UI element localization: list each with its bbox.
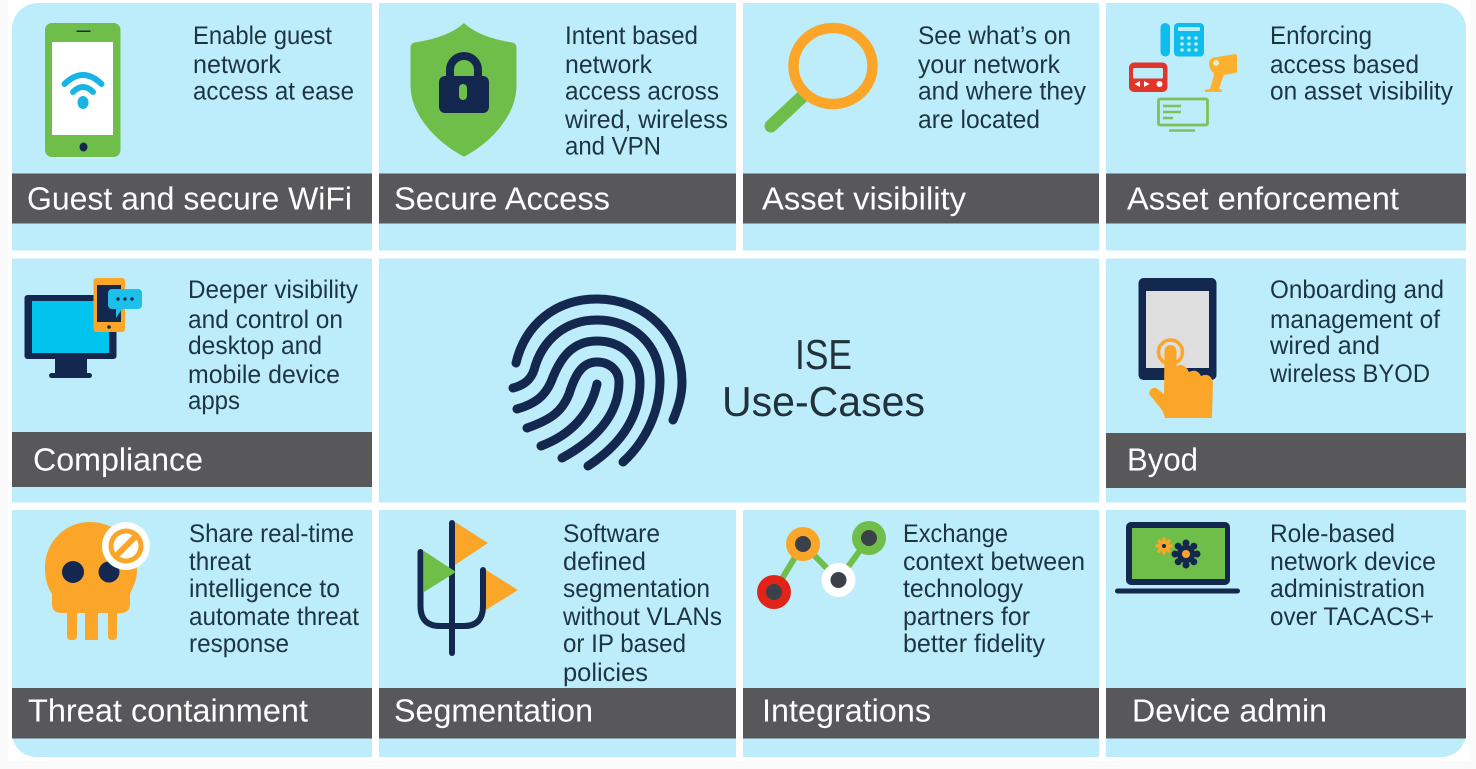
panel: Guest and secure WiFi	[12, 3, 372, 250]
description: device admin: administration	[1270, 575, 1425, 603]
panel: Segmentation	[379, 510, 736, 757]
description: threat containment: response	[189, 630, 289, 658]
description: threat containment: Share real-time	[189, 520, 354, 548]
description: integrations: better fidelity	[903, 630, 1045, 658]
description: compliance: and control on	[188, 306, 343, 334]
description: byod: Onboarding and	[1270, 276, 1444, 304]
description: segmentation: without VLANs	[562, 603, 722, 631]
description: asset enforcement: access based	[1270, 51, 1419, 79]
description: guest wifi: Enable guest	[193, 22, 332, 50]
description: asset enforcement: Enforcing	[1270, 22, 1372, 50]
title: ISE Use-Cases: Use-Cases	[722, 378, 925, 425]
icon: desktop and mobile	[24, 278, 142, 378]
heading: Secure Access: Secure Access	[394, 180, 610, 216]
description: guest wifi: access at ease	[193, 78, 354, 106]
description: integrations	[903, 520, 1085, 658]
description: asset visibility: and where they	[918, 78, 1086, 106]
title: ISE Use-Cases: ISE	[795, 331, 852, 378]
heading: Threat containment: Threat containment	[28, 692, 308, 728]
panel: ISE Use-Cases centre	[379, 258, 1099, 502]
heading: Segmentation: Segmentation	[394, 692, 593, 728]
icon: smartphone with wifi	[45, 23, 120, 157]
description: asset visibility: your network	[918, 51, 1060, 79]
heading: Asset visibility: Asset visibility	[762, 180, 966, 216]
description: integrations: context between	[903, 548, 1085, 576]
icon: orange barcode scanner	[1205, 54, 1237, 92]
description: byod: wired and	[1269, 332, 1380, 360]
description: segmentation: or IP based	[563, 630, 686, 658]
heading: Device admin: Device admin	[1132, 692, 1327, 728]
description: compliance: desktop and	[188, 332, 322, 360]
description: device admin	[1270, 520, 1436, 631]
description: compliance	[188, 276, 358, 415]
description: asset visibility: are located	[918, 106, 1040, 134]
description: asset visibility: See what’s on	[918, 22, 1071, 50]
description: secure access: wired, wireless	[564, 106, 728, 134]
description: segmentation	[562, 520, 722, 687]
heading: Guest and secure WiFi: Guest and secure WiFi	[27, 180, 352, 216]
icon: magnifying glass	[771, 28, 872, 126]
description: segmentation: defined	[563, 548, 646, 576]
icon: connected nodes	[757, 521, 886, 609]
title: ISE Use-Cases	[722, 331, 925, 425]
heading: Compliance: Compliance	[33, 442, 203, 478]
icon: laptop with gears	[1115, 522, 1240, 594]
description: threat containment: threat	[189, 548, 251, 576]
panel: Integrations	[743, 510, 1099, 757]
icon: fingerprint	[513, 299, 682, 466]
description: compliance: mobile device	[188, 361, 340, 389]
panel: Threat containment	[12, 510, 372, 757]
description: device admin: Role-based	[1270, 520, 1395, 548]
description: integrations: partners for	[903, 603, 1030, 631]
description: segmentation: policies	[563, 659, 648, 687]
heading: Asset enforcement: Asset enforcement	[1127, 180, 1399, 216]
description: guest wifi	[193, 22, 354, 106]
description: byod: management of	[1270, 306, 1441, 334]
description: threat containment	[189, 520, 359, 658]
description: asset enforcement: on asset visibility	[1270, 78, 1453, 106]
icon: red pager	[1129, 62, 1168, 92]
panel: Asset visibility	[743, 3, 1099, 250]
description: compliance: apps	[188, 387, 240, 415]
heading: Byod: Byod	[1127, 442, 1198, 478]
description: device admin: network device	[1270, 548, 1436, 576]
panel: Asset enforcement	[1106, 3, 1466, 250]
icon: blue desk phone	[1160, 23, 1204, 56]
icon: tablet with tapping hand	[1138, 278, 1216, 418]
description: secure access: access across	[565, 78, 719, 106]
icon: green terminal	[1158, 99, 1208, 130]
icon: shield with padlock	[412, 25, 515, 155]
description: secure access: Intent based	[565, 22, 698, 50]
panel: Compliance	[12, 258, 372, 502]
heading: Integrations: Integrations	[762, 692, 931, 728]
description: asset enforcement	[1270, 22, 1453, 106]
description: byod: wireless BYOD	[1269, 360, 1430, 388]
description: threat containment: automate threat	[189, 603, 359, 631]
description: device admin: over TACACS+	[1270, 603, 1434, 631]
description: integrations: Exchange	[903, 520, 1008, 548]
description: byod	[1269, 276, 1444, 388]
description: compliance: Deeper visibility	[188, 276, 358, 304]
description: guest wifi: network	[193, 51, 281, 79]
panel: Device admin	[1106, 510, 1466, 757]
description: secure access: and VPN	[565, 132, 661, 160]
panel: Secure Access	[379, 3, 736, 250]
panel: Byod	[1106, 258, 1466, 502]
description: secure access	[564, 22, 728, 160]
icon: segmentation flags	[420, 522, 518, 653]
description: secure access: network	[565, 51, 652, 79]
description: integrations: technology	[903, 575, 1023, 603]
description: threat containment: intelligence to	[189, 575, 340, 603]
description: segmentation: Software	[563, 520, 660, 548]
description: segmentation: segmentation	[563, 575, 710, 603]
icon: networked assets	[1129, 23, 1237, 130]
description: asset visibility	[918, 22, 1086, 134]
icon: skull with block badge	[45, 522, 150, 640]
